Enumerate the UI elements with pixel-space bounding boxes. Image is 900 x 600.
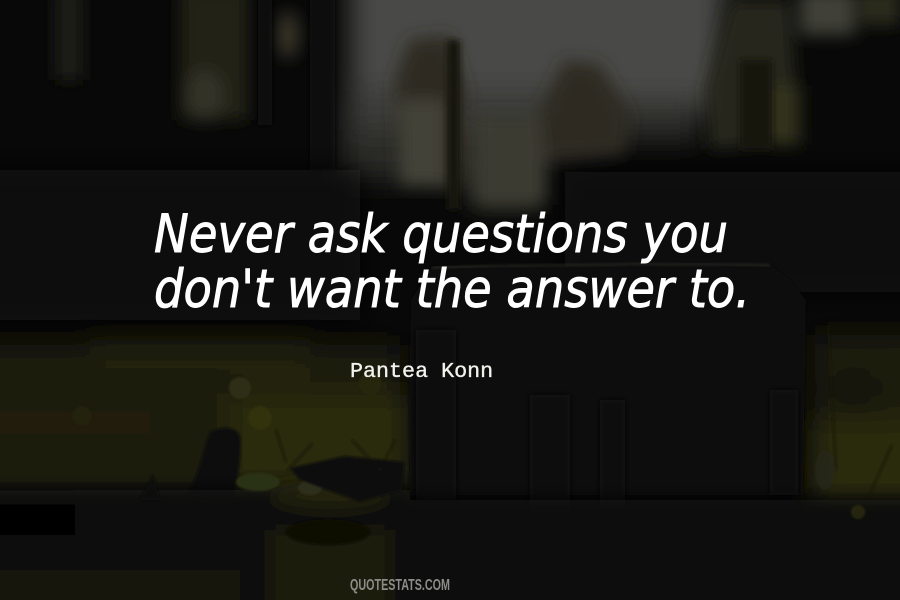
- dead leaf: [186, 428, 241, 500]
- quote text: [154, 204, 750, 320]
- quote line 1: Never ask questions you: [154, 204, 728, 265]
- watermark: QUOTESTATS.COM: [350, 577, 450, 594]
- sky glow: [340, 0, 725, 205]
- dark trunks: [258, 0, 772, 210]
- dark treeline band: [0, 170, 900, 320]
- grass field: [0, 335, 900, 505]
- blurred distant trees: [55, 0, 900, 205]
- tree stump: [409, 265, 806, 495]
- quote line 2: don't want the answer to.: [154, 259, 750, 320]
- ground foliage: [0, 481, 900, 600]
- bokeh spots: [72, 373, 381, 430]
- stump top edge: [432, 264, 770, 268]
- author name: Pantea Konn: [350, 359, 493, 384]
- foreground details: [140, 325, 892, 545]
